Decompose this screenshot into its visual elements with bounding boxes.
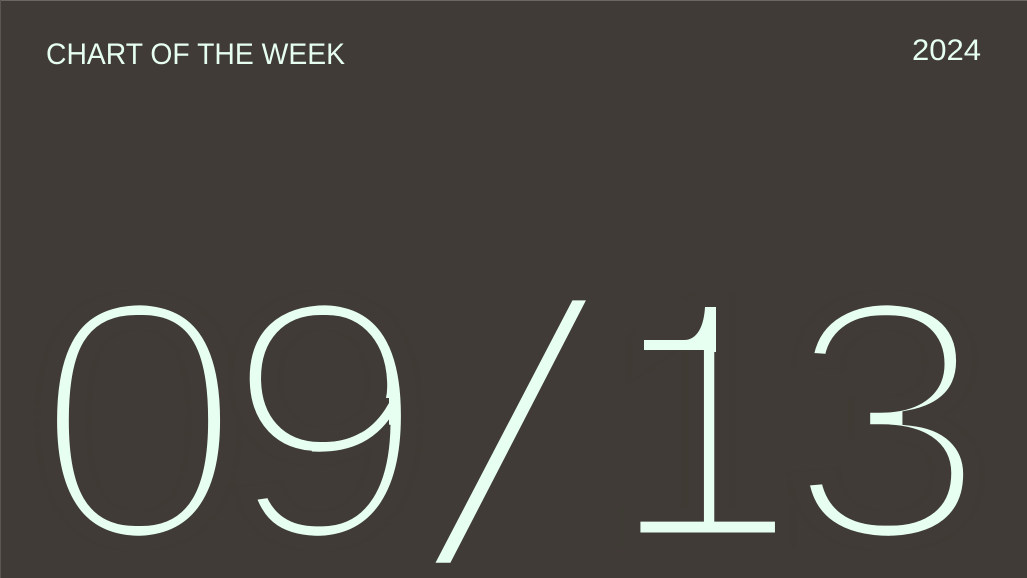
large date: 09/13: [0, 220, 1027, 578]
heading: chart of the week: CHART OF THE WEEK: [46, 38, 345, 71]
year label: 2024: [912, 34, 981, 67]
